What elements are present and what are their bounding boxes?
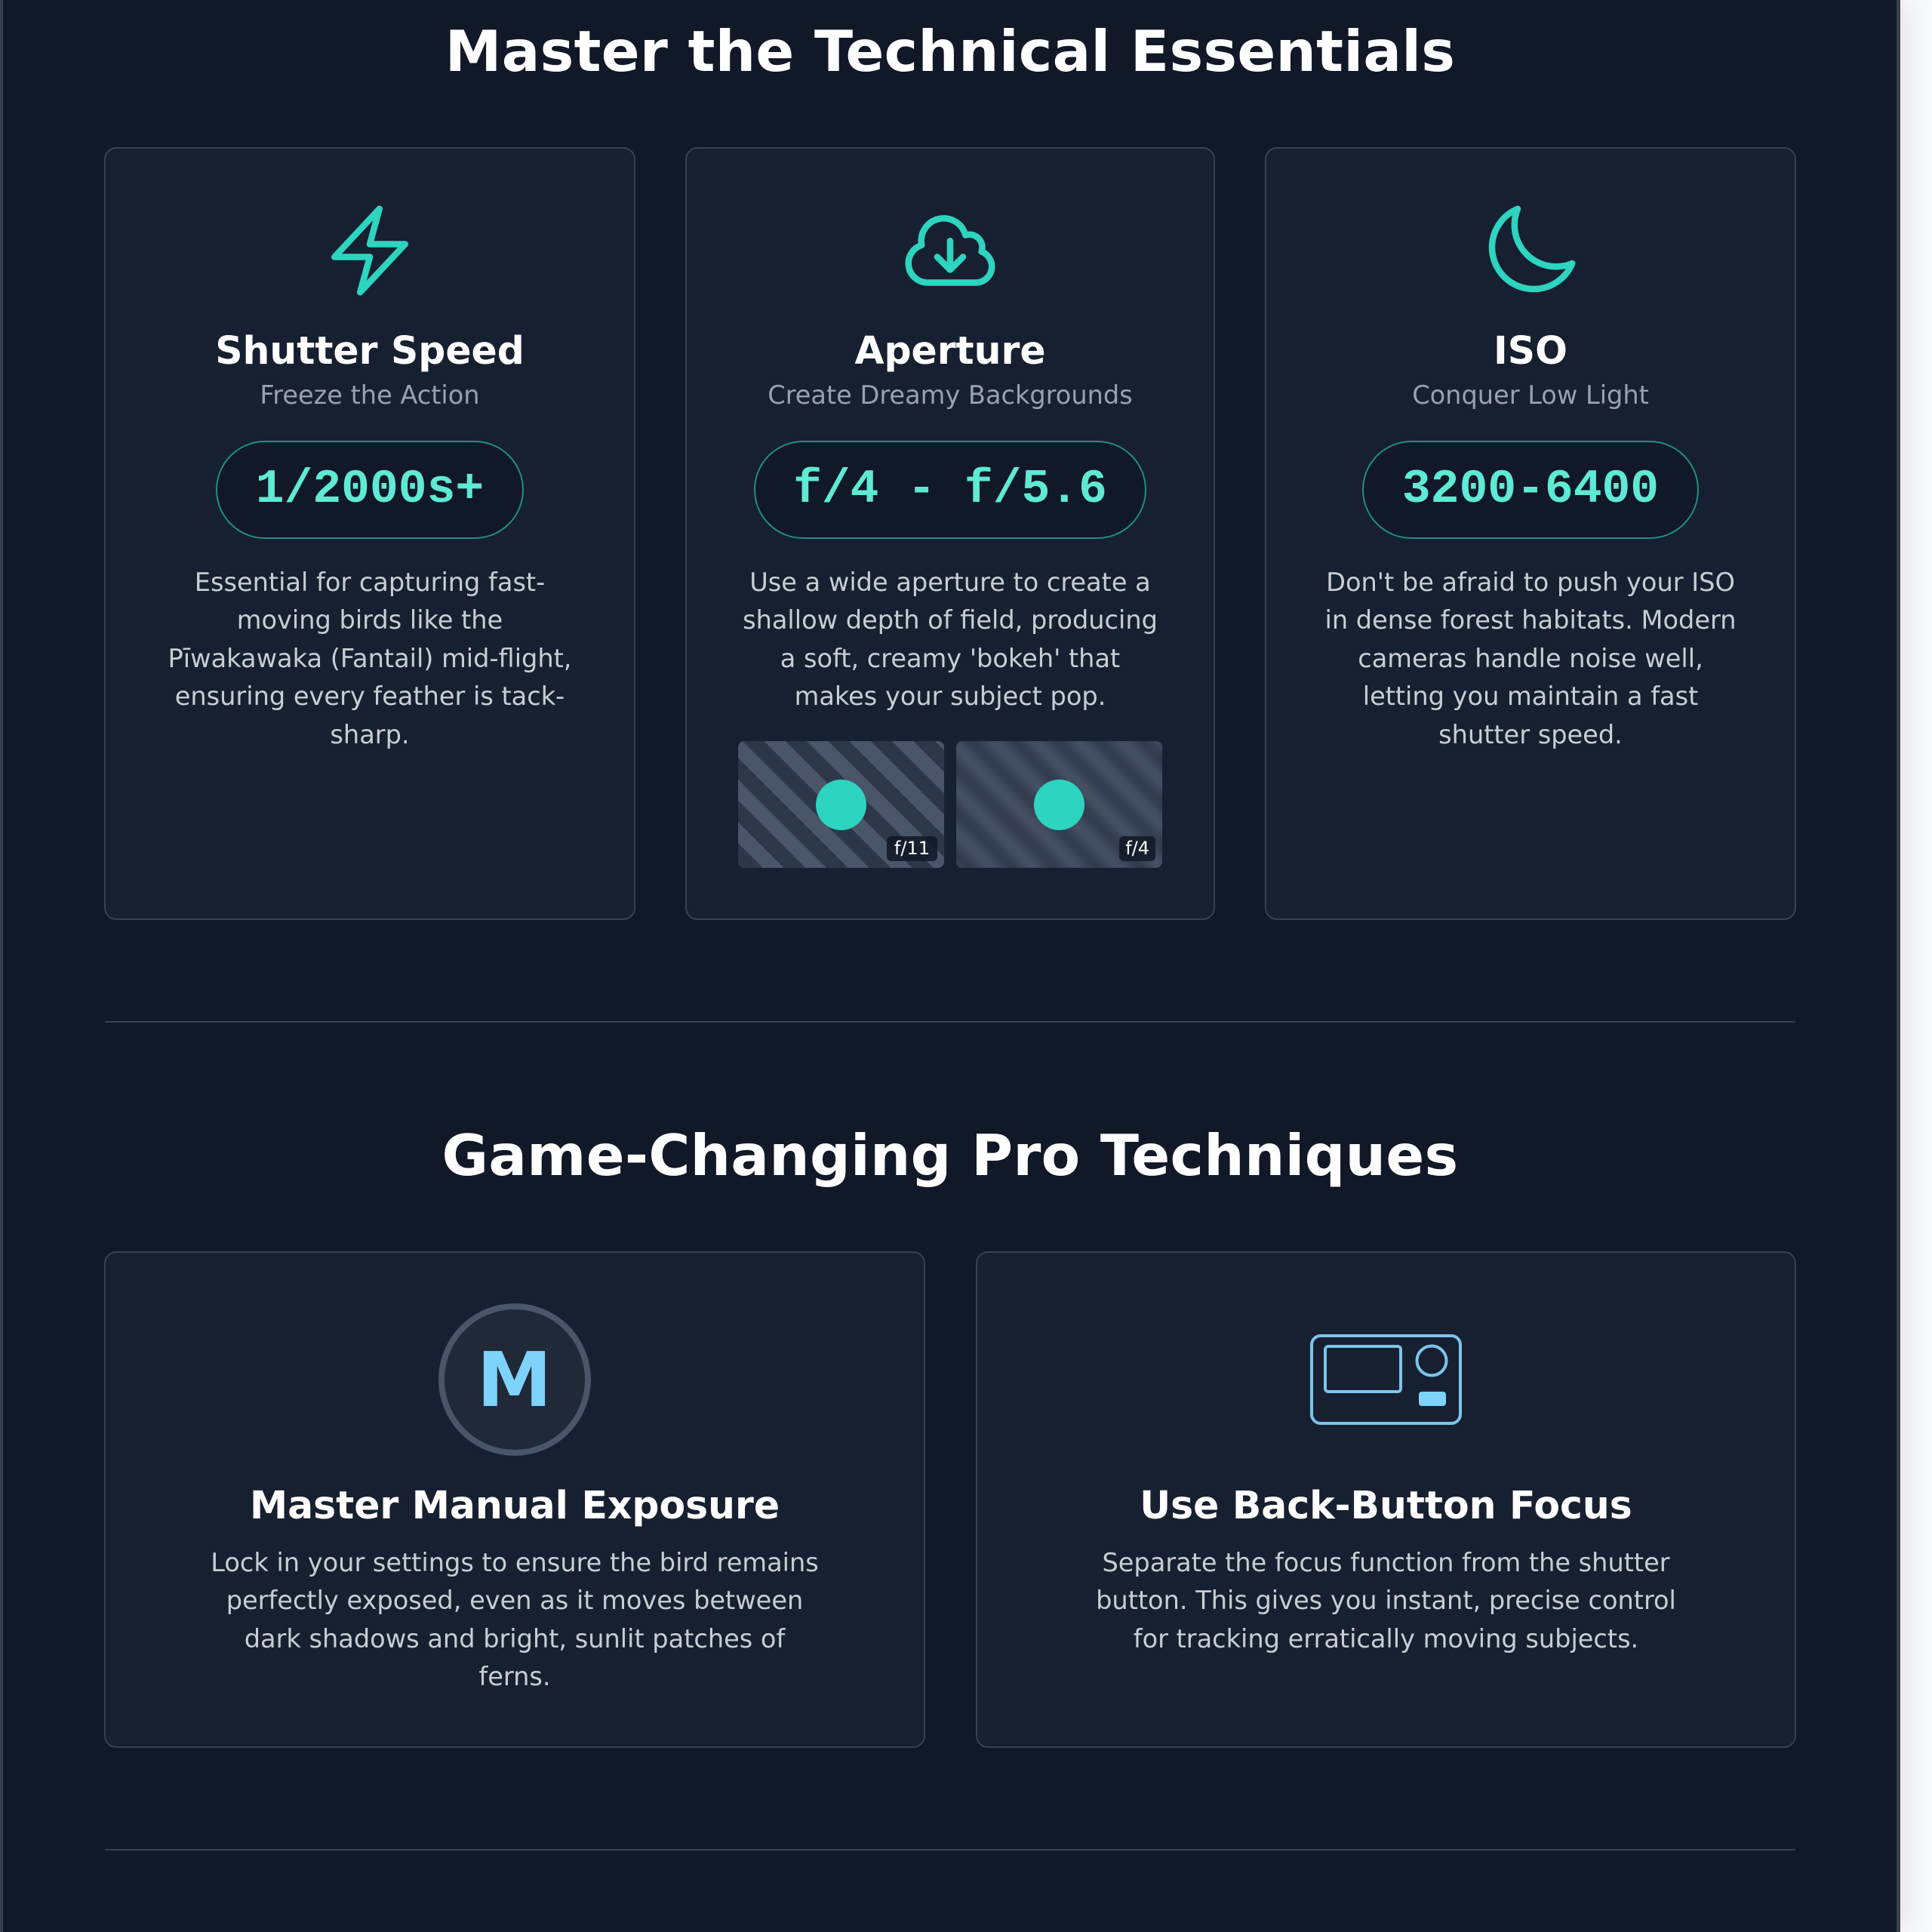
description: shutter speed xyxy=(168,568,571,749)
comparison thumbnail: f/11 sharp background: f/11 xyxy=(894,838,930,859)
description: shutter speed: Pīwakawaka (Fantail) mid-flight, xyxy=(168,644,571,673)
description: manual exposure: ferns. xyxy=(478,1662,551,1691)
description: shutter speed: sharp. xyxy=(330,720,410,749)
icon: M badge xyxy=(438,1303,590,1456)
comparison thumbnail: f/11 sharp background xyxy=(738,741,944,868)
description: aperture: a soft, creamy 'bokeh' that xyxy=(780,644,1120,673)
description: back-button focus: button. This gives you instant, precise control xyxy=(1096,1586,1676,1615)
panel: back-button focus xyxy=(976,1251,1796,1748)
description: shutter speed: Essential for capturing fast- xyxy=(195,568,545,597)
description: back-button focus: Separate the focus function from the shutter xyxy=(1102,1548,1670,1577)
description: ISO: cameras handle noise well, xyxy=(1358,644,1703,673)
description: shutter speed: moving birds like the xyxy=(237,605,503,635)
description: manual exposure: dark shadows and bright, sunlit patches of xyxy=(245,1624,785,1654)
title: ISO: ISO xyxy=(1494,328,1567,373)
description: aperture: Use a wide aperture to create a xyxy=(749,568,1151,597)
icon: M badge: M xyxy=(477,1336,552,1424)
value pill: ISO: 3200-6400 xyxy=(1402,462,1659,516)
description: ISO: letting you maintain a fast xyxy=(1363,681,1698,711)
description: ISO: in dense forest habitats. Modern xyxy=(1324,605,1737,635)
description: ISO: Don't be afraid to push your ISO xyxy=(1326,568,1735,597)
subtitle: aperture: Create Dreamy Backgrounds xyxy=(768,380,1133,410)
panel: manual exposure xyxy=(104,1251,925,1748)
icon: moon xyxy=(1488,205,1576,293)
description: ISO xyxy=(1324,568,1737,749)
description: ISO: shutter speed. xyxy=(1438,720,1623,749)
title: manual exposure: Master Manual Exposure xyxy=(250,1482,780,1527)
description: manual exposure xyxy=(211,1548,819,1691)
subtitle: shutter speed: Freeze the Action xyxy=(260,380,480,410)
description: manual exposure: perfectly exposed, even as it moves between xyxy=(226,1586,803,1615)
heading: pro techniques: Game-Changing Pro Techniques xyxy=(442,1122,1458,1189)
title: aperture: Aperture xyxy=(854,328,1046,373)
description: aperture xyxy=(743,568,1158,711)
icon: lightning bolt xyxy=(331,205,408,296)
description: aperture: makes your subject pop. xyxy=(795,681,1106,711)
description: shutter speed: ensuring every feather is tack- xyxy=(175,681,565,711)
panel: aperture xyxy=(685,147,1215,920)
description: back-button focus xyxy=(1096,1548,1676,1654)
title: back-button focus: Use Back-Button Focus xyxy=(1140,1482,1632,1527)
icon: camera back xyxy=(1310,1334,1462,1425)
value pill: aperture: f/4 - f/5.6 xyxy=(793,462,1107,516)
comparison thumbnail: f/4 blurred background xyxy=(956,741,1162,868)
panel: shutter speed xyxy=(104,147,635,920)
subtitle: ISO: Conquer Low Light xyxy=(1412,380,1649,410)
value pill: shutter speed: 1/2000s+ xyxy=(256,462,484,516)
comparison thumbnail: f/4 blurred background: f/4 xyxy=(1125,838,1149,859)
title: shutter speed: Shutter Speed xyxy=(215,328,525,373)
description: aperture: shallow depth of field, producing xyxy=(743,605,1158,635)
panel: ISO xyxy=(1265,147,1796,920)
icon: cloud download xyxy=(905,215,995,286)
description: back-button focus: for tracking erratically moving subjects. xyxy=(1134,1624,1638,1654)
description: manual exposure: Lock in your settings to ensure the bird remains xyxy=(211,1548,819,1577)
heading: technical essentials: Master the Technical Essentials xyxy=(445,18,1455,85)
